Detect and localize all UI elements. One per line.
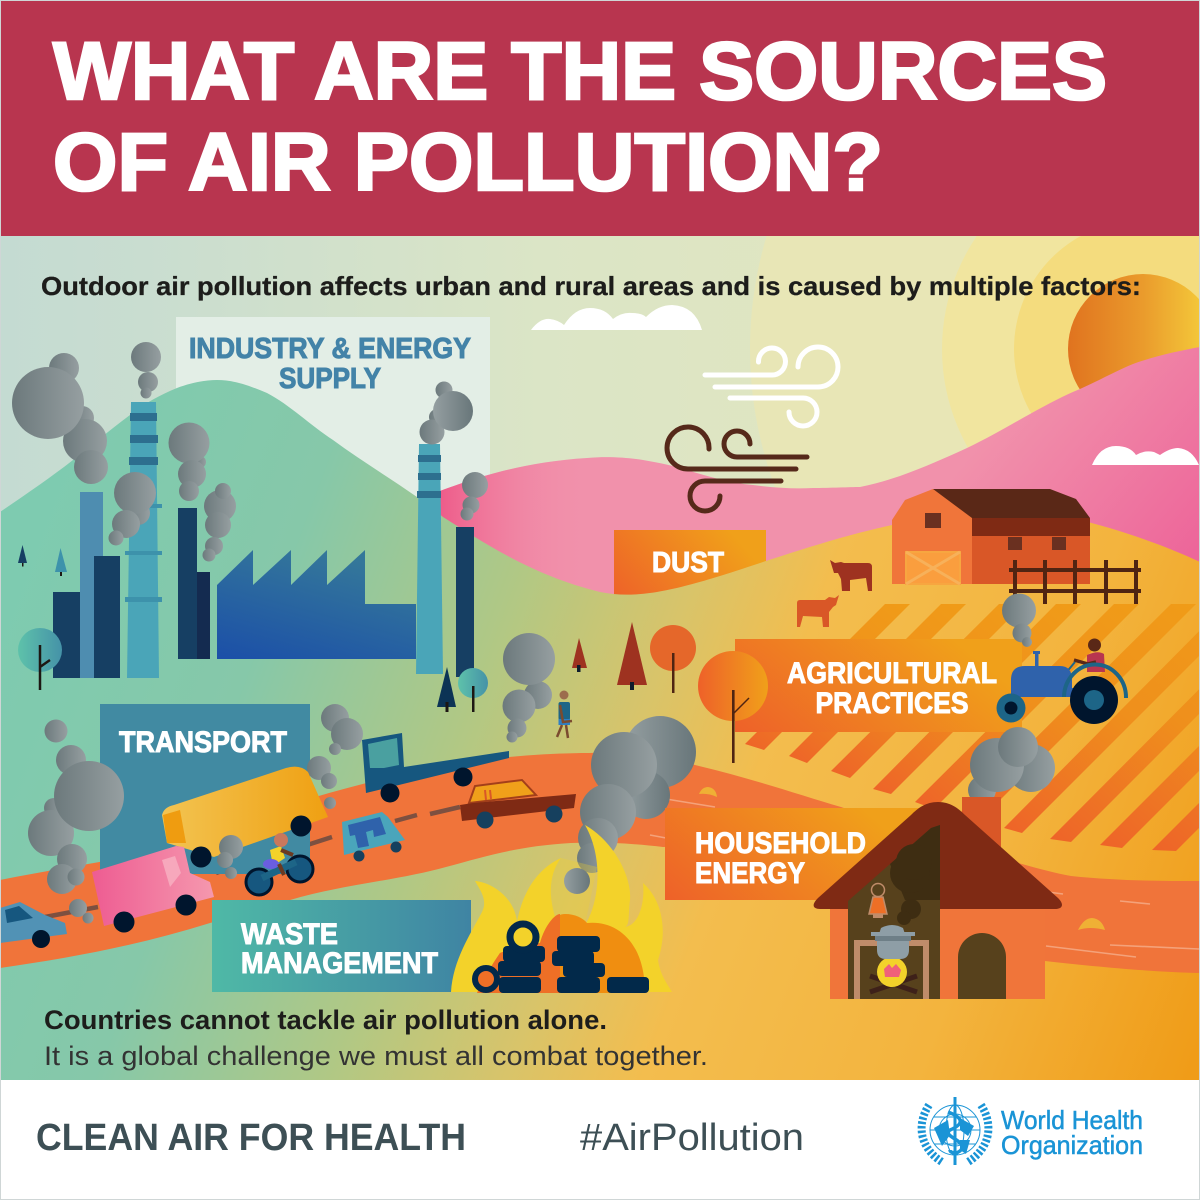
tree large orange [698, 651, 768, 763]
panel: household energy label [665, 808, 925, 900]
WHO logo: World Health [1001, 1105, 1143, 1135]
WHO logo [922, 1097, 1143, 1165]
closing statement: It is a global challenge we must all combat together. [44, 1041, 708, 1071]
panel: dust label [614, 530, 766, 600]
panel: waste management label: WASTE [241, 918, 338, 951]
barn [892, 489, 1090, 584]
icon: white wind [705, 347, 838, 426]
panel: dust label: DUST [652, 547, 724, 579]
trees centre [437, 667, 488, 712]
hashtag: #AirPollution [580, 1117, 804, 1159]
pink hill [440, 347, 1200, 620]
bus: yellow [162, 767, 328, 868]
car: brown [460, 780, 576, 828]
panel: industry label [176, 317, 490, 507]
motorbike [246, 833, 313, 895]
ground and mountain [0, 380, 1200, 1080]
icon: brown wind [667, 427, 807, 511]
trees orange [572, 622, 696, 693]
title banner: WHAT ARE THE SOURCES [53, 26, 1107, 117]
cows [797, 560, 872, 627]
industry and energy buildings [53, 402, 474, 678]
pink van [92, 846, 214, 932]
panel: agricultural practices label: AGRICULTURAL [787, 657, 997, 690]
person walking [557, 690, 572, 738]
fire with tyres [451, 825, 672, 993]
panel: industry label: SUPPLY [279, 363, 381, 395]
smoke: centre [502, 633, 555, 742]
road [0, 753, 1200, 973]
title banner [0, 0, 1200, 236]
fence [1009, 560, 1141, 604]
tractor [996, 638, 1126, 724]
cloud left [531, 305, 702, 330]
smoke: fire [577, 716, 696, 873]
closing statement: Countries cannot tackle air pollution alone. [44, 1005, 607, 1035]
WHO logo: Organization [1001, 1130, 1143, 1160]
tuk tuk [342, 812, 405, 862]
background scene [1, 236, 1199, 512]
panel: agricultural practices label [735, 639, 1022, 732]
smoke: right stack big puff [433, 391, 473, 431]
heading: outdoor air pollution text: Outdoor air pollution affects urban and rural areas and is caused by multiple factors: [41, 271, 1141, 301]
smoke: truck and bus [307, 704, 363, 809]
field stripes [745, 604, 1200, 851]
campaign name: CLEAN AIR FOR HEALTH [36, 1117, 466, 1159]
panel: transport label [100, 704, 310, 874]
panel: waste management label: MANAGEMENT [241, 947, 438, 980]
smoke: left transport cloud [28, 720, 124, 894]
cloud right [1092, 446, 1199, 465]
smoke: tractor [1002, 594, 1036, 647]
truck [362, 733, 509, 802]
car: blue [0, 902, 67, 948]
smoke: hut chimney [968, 727, 1055, 804]
smoke: factory stacks [12, 342, 488, 562]
smoke: van exhaust [69, 899, 94, 924]
title banner: OF AIR POLLUTION? [53, 117, 883, 208]
panel: waste management label [212, 900, 471, 992]
hut [814, 797, 1062, 999]
panel: household energy label: ENERGY [695, 857, 805, 890]
smoke: bus exhaust [217, 835, 243, 879]
sun and sun rings [750, 236, 1199, 488]
panel: transport label: TRANSPORT [119, 726, 287, 759]
trees left [18, 545, 67, 690]
footer [0, 1080, 1200, 1200]
cooking pot and fire [857, 925, 926, 999]
panel: industry label: INDUSTRY & ENERGY [189, 333, 471, 365]
closing statement [44, 1005, 708, 1071]
lantern [869, 884, 887, 918]
panel: household energy label: HOUSEHOLD [695, 827, 866, 860]
panel: agricultural practices label: PRACTICES [816, 687, 968, 720]
